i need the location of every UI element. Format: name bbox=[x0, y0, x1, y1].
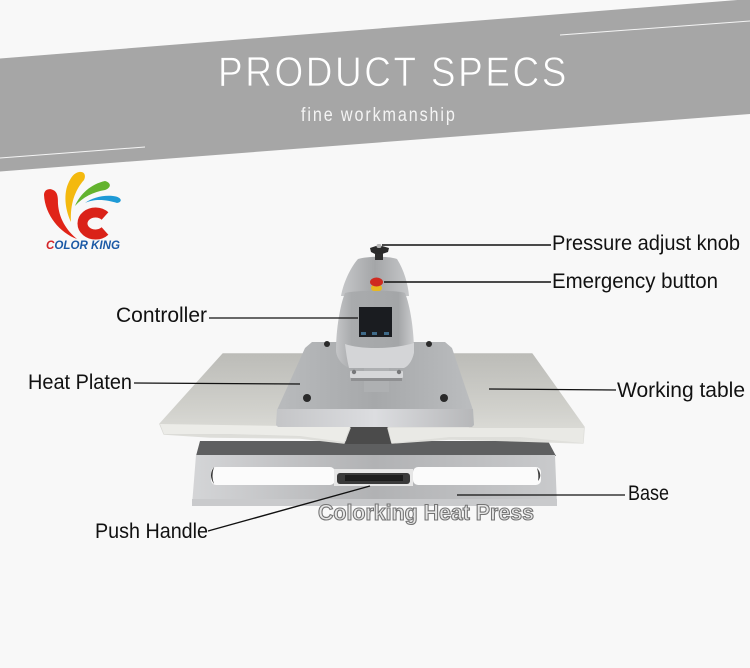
label: controller: Controller bbox=[116, 304, 207, 327]
label: push handle: Push Handle bbox=[95, 520, 208, 543]
label: heat platen: Heat Platen bbox=[28, 371, 132, 394]
push handle slot bbox=[334, 469, 413, 486]
label: pressure adjust knob: Pressure adjust knob bbox=[552, 232, 740, 255]
gap shadow bbox=[345, 427, 396, 444]
subtitle: fine workmanship bbox=[301, 104, 455, 125]
icon: yellow swoosh bbox=[65, 172, 85, 222]
label: base: Base bbox=[628, 482, 669, 505]
icon: letter C bbox=[82, 213, 105, 234]
icon: pressure knob bbox=[370, 244, 389, 260]
logo: Color King bbox=[44, 172, 121, 252]
label: push handle bbox=[95, 486, 370, 543]
heat platen bbox=[276, 341, 474, 427]
heat press machine bbox=[160, 244, 584, 506]
right working plate bbox=[388, 354, 584, 443]
watermark: Colorking Heat Press bbox=[318, 500, 534, 525]
base bbox=[192, 441, 557, 506]
header band bbox=[0, 0, 750, 172]
left working plate bbox=[160, 354, 350, 443]
label: working table: Working table bbox=[617, 379, 745, 402]
bracket bbox=[350, 362, 403, 392]
logo wordmark: COLOR KING bbox=[46, 240, 120, 252]
icon: emergency button bbox=[370, 278, 383, 291]
icon: red swoosh bbox=[44, 189, 77, 239]
title: PRODUCT SPECS bbox=[218, 49, 566, 96]
press head bbox=[336, 244, 414, 368]
label: emergency button: Emergency button bbox=[552, 270, 718, 293]
icon: green swoosh bbox=[75, 181, 110, 206]
icon: blue swoosh bbox=[85, 196, 121, 203]
controller screen bbox=[359, 307, 392, 337]
